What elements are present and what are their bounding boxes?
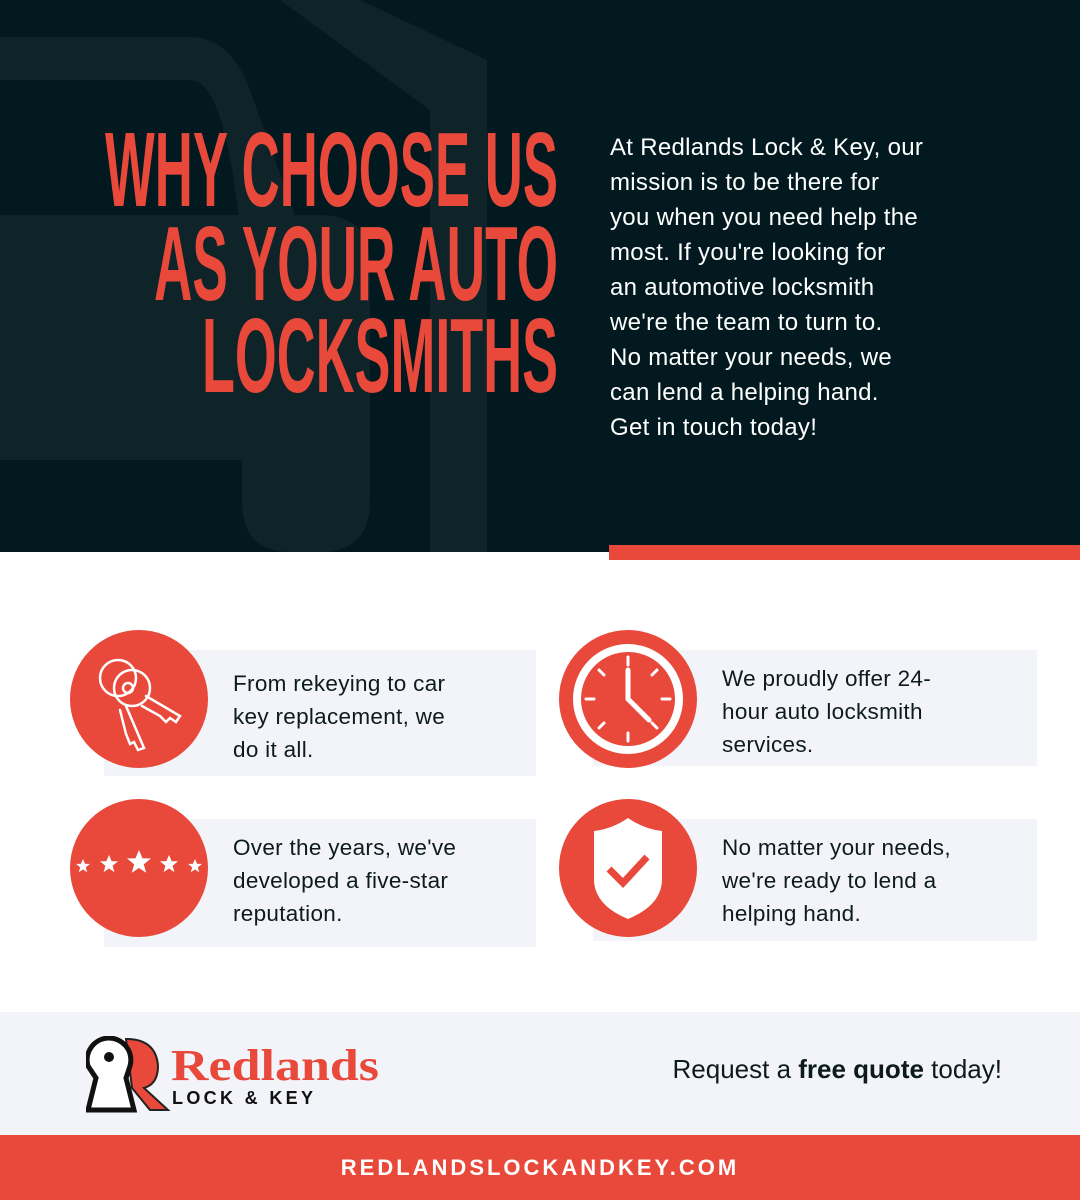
logo: Redlands: [171, 1041, 379, 1090]
card text: From rekeying to car: [233, 671, 445, 696]
footer band: [0, 1012, 1080, 1135]
header panel: [0, 0, 1080, 552]
red accent bar: [609, 545, 1080, 560]
intro paragraph: an automotive locksmith: [610, 274, 874, 301]
card text: we're ready to lend a: [722, 868, 936, 893]
card text: hour auto locksmith: [722, 699, 923, 724]
card text: [722, 835, 951, 926]
intro paragraph: Get in touch today!: [610, 414, 817, 441]
logo: LOCK & KEY: [172, 1088, 313, 1108]
card text: [233, 671, 445, 762]
card: shield: [559, 799, 1037, 941]
icon: clock: [559, 630, 697, 768]
icon: keys: [70, 630, 208, 768]
card text: key replacement, we: [233, 704, 445, 729]
card: keys: [70, 630, 536, 776]
icon: shield check: [559, 799, 697, 937]
intro paragraph: most. If you're looking for: [610, 239, 885, 266]
card text: We proudly offer 24-: [722, 666, 931, 691]
intro paragraph: At Redlands Lock & Key, our: [610, 134, 923, 161]
card: clock: [559, 630, 1037, 768]
intro paragraph: we're the team to turn to.: [610, 309, 883, 336]
card text: Over the years, we've: [233, 835, 456, 860]
intro paragraph: can lend a helping hand.: [610, 379, 879, 406]
title: [105, 111, 558, 415]
intro paragraph: No matter your needs, we: [610, 344, 892, 371]
card: stars: [70, 799, 536, 947]
card text: [722, 666, 931, 757]
intro paragraph: you when you need help the: [610, 204, 918, 231]
website bar: REDLANDSLOCKANDKEY.COM: [341, 1155, 739, 1180]
card text: No matter your needs,: [722, 835, 951, 860]
call to action: Request a free quote today!: [672, 1054, 1002, 1084]
intro paragraph: [610, 134, 923, 441]
card text: do it all.: [233, 737, 314, 762]
card text: helping hand.: [722, 901, 861, 926]
card text: [233, 835, 456, 926]
icon: five stars: [70, 799, 208, 937]
card text: reputation.: [233, 901, 343, 926]
card text: services.: [722, 732, 813, 757]
card text: developed a five-star: [233, 868, 448, 893]
intro paragraph: mission is to be there for: [610, 169, 879, 196]
website bar: [0, 1135, 1080, 1200]
logo: [86, 1036, 379, 1112]
